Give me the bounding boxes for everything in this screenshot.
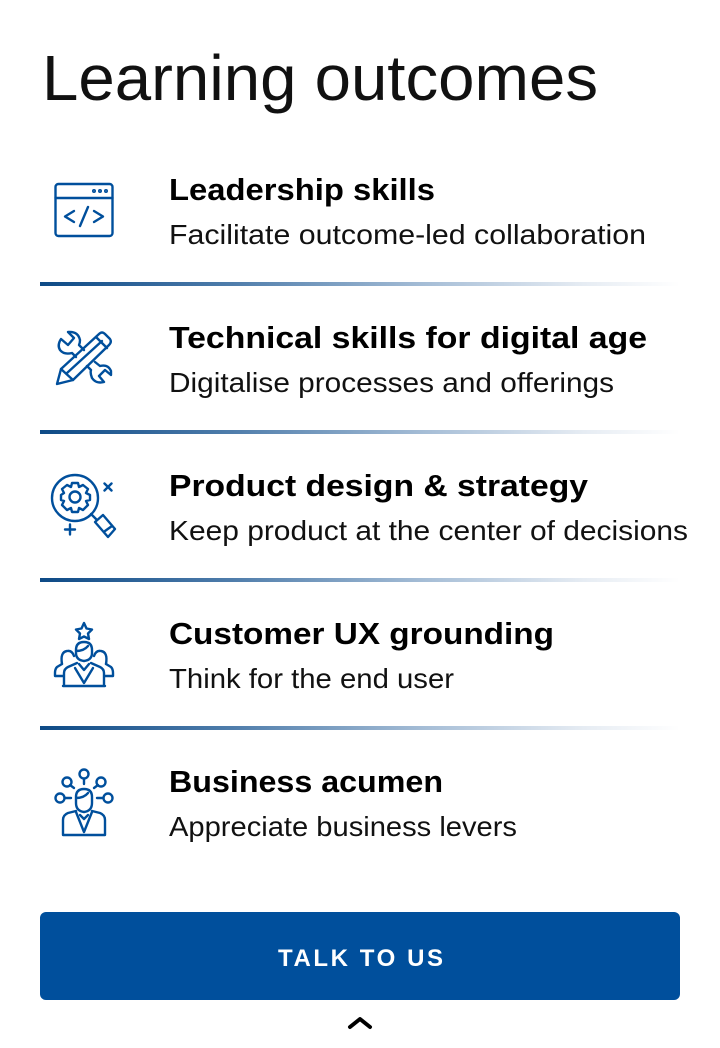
heading: Product design & strategy [169, 468, 589, 503]
row: product design [52, 468, 688, 546]
title: Learning outcomes [42, 42, 598, 114]
description: Appreciate business levers [169, 811, 517, 842]
row: customer UX [55, 616, 554, 694]
description: Digitalise processes and offerings [169, 367, 614, 398]
button: talk to us [40, 912, 680, 1000]
heading: Customer UX grounding [169, 616, 554, 651]
icon: magnifier with gear [52, 475, 115, 537]
icon: pencil and wrench [57, 332, 111, 384]
description: Keep product at the center of decisions [169, 515, 688, 546]
icon: chevron up [350, 1019, 370, 1027]
row: technical skills [57, 320, 647, 398]
button: talk to us: TALK TO US [278, 945, 443, 972]
heading: Business acumen [169, 764, 443, 799]
heading: Leadership skills [169, 172, 435, 207]
description: Facilitate outcome-led collaboration [169, 219, 646, 250]
icon: person with idea nodes [56, 770, 112, 835]
description: Think for the end user [169, 663, 454, 694]
row: business acumen [56, 764, 517, 842]
heading: Technical skills for digital age [169, 320, 647, 355]
icon: code window [56, 184, 112, 236]
icon: team with star [55, 623, 113, 686]
row: leadership skills [56, 172, 646, 250]
